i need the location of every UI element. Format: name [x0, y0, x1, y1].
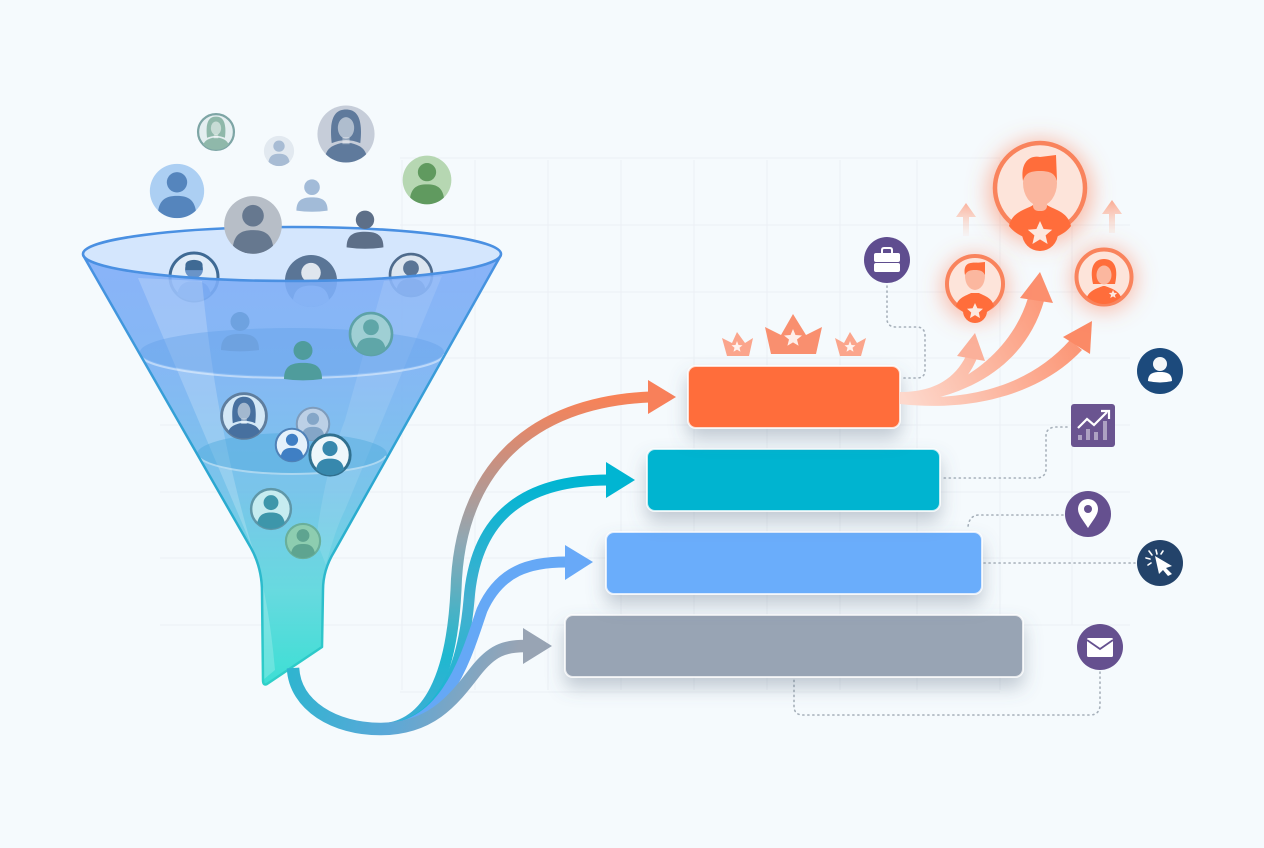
funnel rim	[83, 227, 501, 281]
right glass highlight	[316, 276, 442, 565]
bar: orange tier	[688, 366, 900, 428]
funnel outline	[83, 255, 501, 684]
crown: left	[722, 332, 753, 356]
up arrows	[956, 200, 1122, 236]
bar: grey tier	[565, 615, 1023, 677]
upper liquid level	[140, 328, 444, 378]
crown: centre	[765, 314, 822, 354]
arrow to orange tier	[378, 380, 676, 729]
crown: right	[835, 332, 866, 356]
dotted connectors	[794, 286, 1135, 715]
champion avatars	[942, 140, 1136, 323]
grid backdrop	[160, 158, 1130, 692]
icon: briefcase	[864, 237, 910, 283]
people entering behind the funnel glass	[170, 253, 432, 307]
growth arrows from orange bar	[900, 272, 1092, 406]
icon: location pin	[1065, 491, 1111, 537]
arrow to left champion	[900, 333, 985, 404]
arrow to centre champion	[905, 272, 1053, 404]
crowns	[722, 314, 866, 356]
avatar: left champion	[942, 255, 1008, 323]
arrow to blue tier	[382, 545, 593, 729]
arrow to right champion	[900, 321, 1092, 406]
bar: blue tier	[606, 532, 982, 594]
lower liquid level	[197, 433, 387, 475]
funnel mouth	[83, 227, 501, 281]
flow arrows from the funnel	[293, 380, 676, 729]
arrow to grey tier	[293, 628, 552, 729]
avatar: centre champion	[988, 140, 1092, 251]
arrow to teal tier	[380, 462, 635, 729]
icon: envelope	[1077, 624, 1123, 670]
tier bars	[565, 366, 1023, 677]
left glass highlight	[138, 278, 275, 680]
icon: cursor click	[1137, 540, 1183, 586]
funnel body	[83, 255, 501, 684]
bar: teal tier	[647, 449, 940, 511]
people falling into the funnel	[150, 105, 451, 558]
icon: growth chart	[1071, 404, 1115, 447]
icon: user	[1137, 348, 1183, 394]
funnel	[83, 227, 501, 684]
avatar: right champion	[1072, 247, 1136, 311]
